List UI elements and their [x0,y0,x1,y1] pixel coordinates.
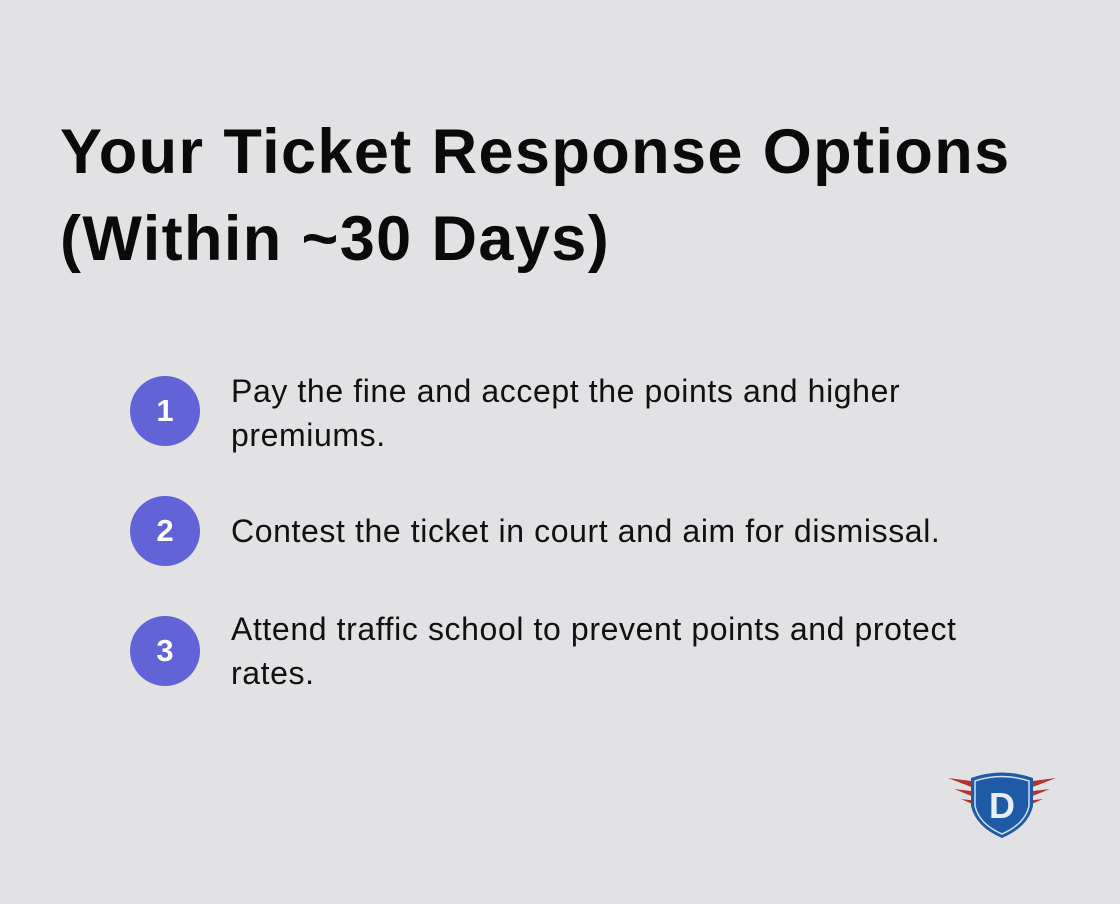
step 2 badge: 2 [156,513,174,548]
step 3 badge [130,616,200,686]
step 2 text: Contest the ticket in court and aim for dismissal. [231,513,940,549]
step 3 text: Attend traffic school to prevent points and protect [231,611,957,647]
step 1 text: Pay the fine and accept the points and higher [231,373,900,409]
step 3 text: rates. [231,655,315,691]
title: (Within ~30 Days) [60,204,610,274]
title: Your Ticket Response Options [60,117,1011,187]
step 1 badge [130,376,200,446]
step 1 text: premiums. [231,417,386,453]
icon: shield logo: D [989,785,1015,826]
step 1 text [231,373,900,453]
step 1 badge: 1 [156,393,174,428]
icon: shield logo [948,772,1056,838]
title [60,117,1011,274]
step 2 badge [130,496,200,566]
step 3 badge: 3 [156,633,174,668]
step 3 text [231,611,957,691]
